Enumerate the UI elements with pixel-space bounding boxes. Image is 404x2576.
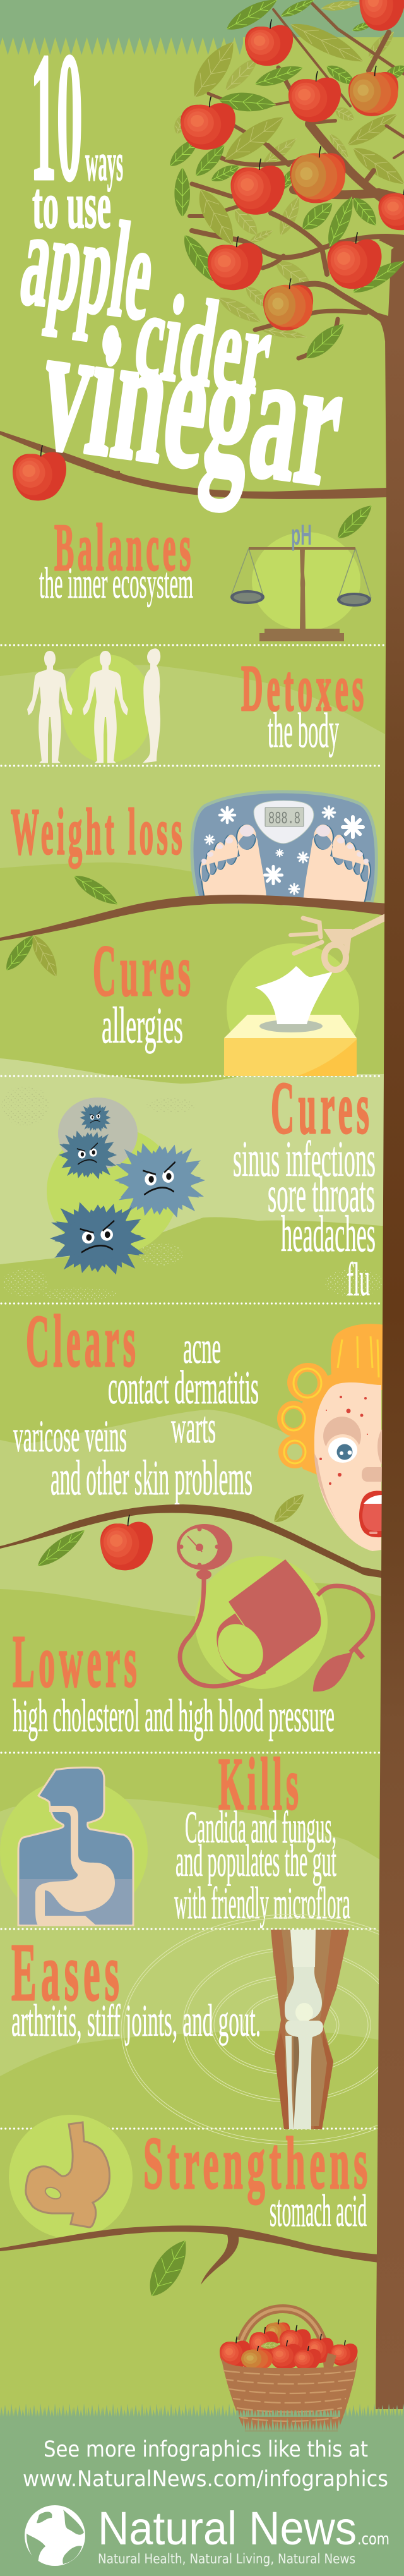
footer call to action: [23, 2437, 388, 2492]
panel: eases: Eases: [11, 1927, 124, 2018]
title: [14, 15, 354, 528]
icon: pH balance scale: [230, 519, 371, 641]
title branch: [0, 431, 386, 499]
second branch with leaves: [0, 870, 404, 981]
icon: woman with acne: [277, 1324, 395, 1551]
panel: balances: the inner ecosystem: [39, 559, 193, 608]
logo: Natural News: [25, 2502, 389, 2567]
icon: globe: [25, 2505, 85, 2566]
text block: varicose veins: [13, 1411, 127, 1461]
icon: tissue box and hand: [224, 917, 386, 1076]
icon: bathroom scale with feet: 888.8: [268, 810, 300, 829]
panel: cures allergies: allergies: [102, 996, 183, 1054]
tree crown join: [363, 234, 404, 341]
panel: clears: Clears: [26, 1300, 140, 1382]
title: apple: [14, 182, 162, 349]
icon: falling apple: [13, 445, 66, 500]
panel: kills: [0, 1743, 350, 1928]
text block: [174, 1802, 350, 1928]
decorative rings: [121, 1914, 404, 2144]
icon: stomach: [9, 2115, 133, 2239]
title: ways: [85, 133, 123, 192]
icon: blood pressure cuff: [177, 1524, 373, 1691]
divider dots: [1, 645, 384, 2129]
text block: warts: [171, 1402, 216, 1453]
panel: strengthens: [9, 2115, 372, 2239]
icon: human body figures: [27, 648, 160, 763]
panel: detoxes: [27, 648, 367, 763]
text block: flu: [347, 1254, 370, 1306]
text block: [233, 1132, 376, 1306]
title: cider: [127, 266, 280, 421]
text block: [13, 1322, 259, 1505]
tagline: Natural Health, Natural Living, Natural News: [98, 2551, 355, 2567]
panel: eases: [11, 1914, 404, 2144]
panel: cures allergies: Cures: [93, 931, 194, 1011]
domain: .com: [357, 2530, 389, 2549]
panel: balances: [39, 500, 377, 641]
icon: bathroom scale with feet: [192, 792, 376, 904]
panel: lowers: Lowers: [13, 1620, 141, 1703]
leaf: [333, 500, 377, 543]
icon: digestive system: [0, 1767, 148, 1925]
third branch: [0, 1489, 385, 1578]
panel: cures infections: [45, 1067, 376, 1306]
panel: lowers: [13, 1524, 373, 1741]
panel: cures allergies: [93, 917, 386, 1076]
panel: weight loss: [11, 792, 376, 904]
tree trunk: [376, 335, 404, 2417]
fourth branch: [0, 2225, 379, 2302]
icon: apple basket: [220, 2309, 358, 2433]
icon: knee joint: [271, 1930, 349, 2129]
title: to use: [32, 168, 111, 242]
footer call to action: See more infographics like this at: [44, 2437, 368, 2462]
text block: acne: [183, 1322, 221, 1373]
panel: clears: [13, 1300, 395, 1551]
apple tree canopy: [165, 0, 404, 365]
branches: [189, 3, 404, 358]
apples on the tree: [181, 0, 404, 330]
green leaves: [165, 0, 404, 365]
icon: pH balance scale: pH: [291, 519, 312, 551]
icon: germs: [45, 1098, 210, 1287]
title: 10: [30, 15, 83, 219]
panel: balances: Balances: [54, 511, 194, 584]
pale background leaves: [172, 0, 404, 341]
wordmark: Natural News: [98, 2502, 357, 2555]
